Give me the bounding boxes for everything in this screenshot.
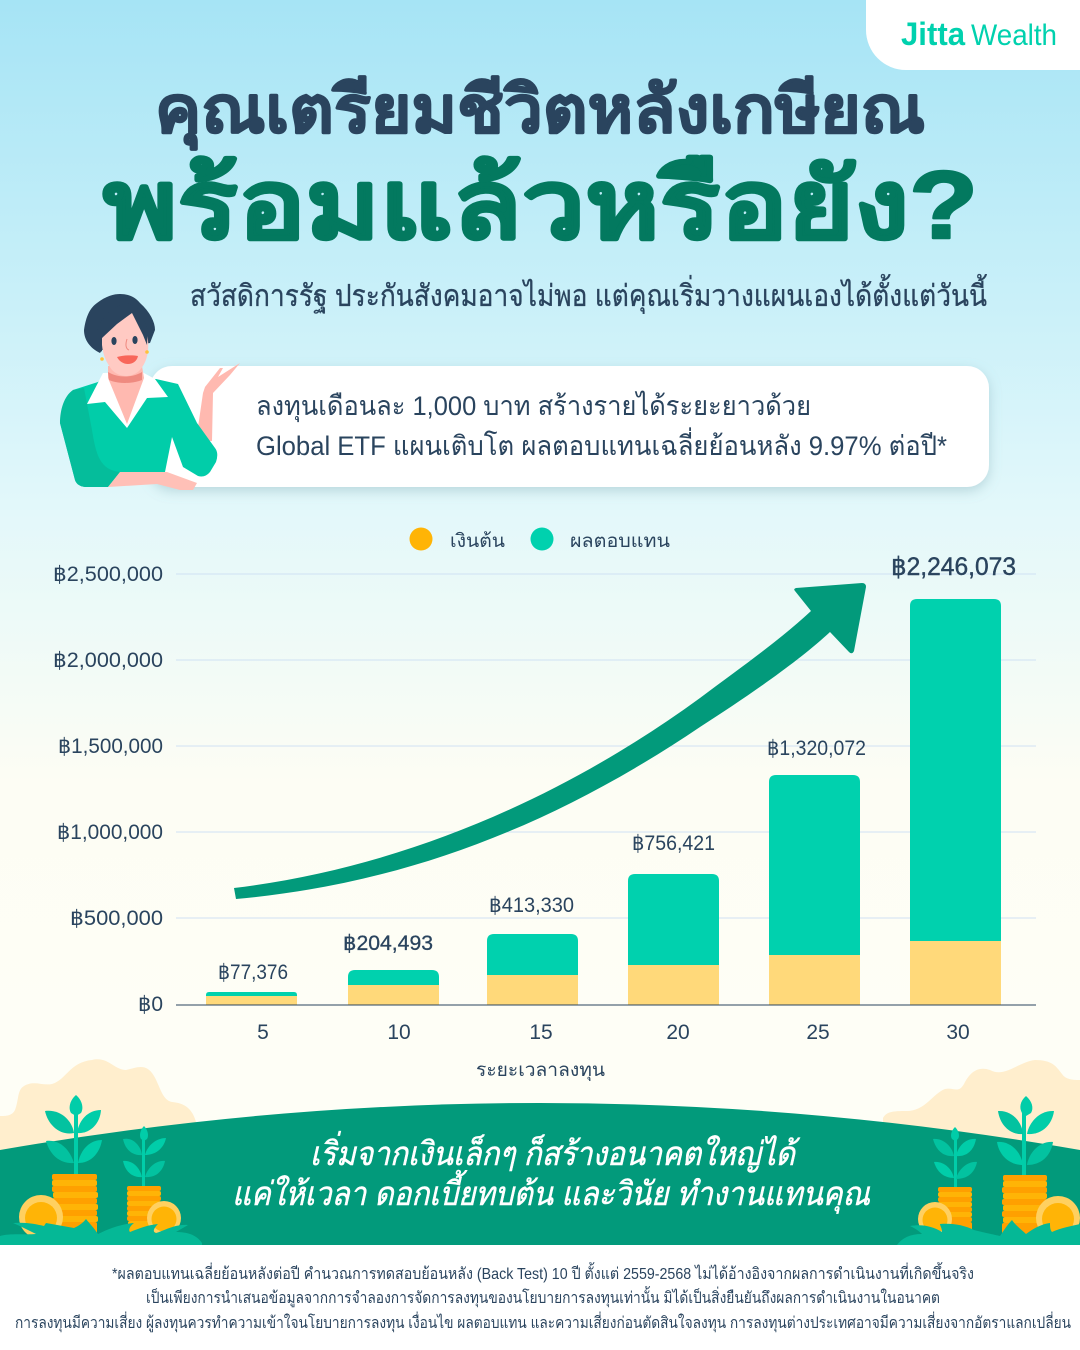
y axis labels: ฿2,000,000 bbox=[53, 649, 163, 672]
logo: Jitta Wealth: Wealth bbox=[971, 19, 1057, 52]
bar value labels: ฿204,493 bbox=[343, 932, 433, 955]
legend: เงินต้น bbox=[450, 531, 505, 552]
banner headline: เริ่มจากเงินเล็กๆ ก็สร้างอนาคตใหญ่ได้ bbox=[310, 1131, 800, 1173]
large plant bbox=[45, 1095, 102, 1174]
y axis labels: ฿0 bbox=[138, 993, 163, 1016]
foliage bbox=[897, 1220, 1080, 1245]
callout text bbox=[256, 391, 947, 461]
bar value labels bbox=[218, 553, 1016, 984]
subtitle: สวัสดิการรัฐ ประกันสังคมอาจไม่พอ แต่คุณเริ่มวางแผนเองได้ตั้งแต่วันนี้ bbox=[190, 274, 987, 315]
small plant bbox=[123, 1126, 166, 1187]
hair back bbox=[84, 294, 155, 353]
small plant bbox=[933, 1127, 977, 1189]
banner illustration: right plants and coins bbox=[897, 1096, 1080, 1245]
coins bbox=[19, 1195, 63, 1239]
raised arm bbox=[196, 363, 240, 441]
bar value labels: ฿756,421 bbox=[632, 832, 715, 855]
fringe bbox=[96, 303, 148, 352]
x axis labels: 25 bbox=[806, 1021, 830, 1044]
title line 2: พร้อมแล้วหรือยัง? bbox=[103, 152, 978, 259]
y axis labels: ฿2,500,000 bbox=[53, 563, 163, 586]
x axis labels: 15 bbox=[529, 1021, 553, 1044]
growth arrow bbox=[234, 583, 866, 899]
small coin stack bbox=[127, 1186, 161, 1235]
x axis labels: 5 bbox=[257, 1021, 269, 1044]
decorative hill blobs bbox=[0, 1059, 1080, 1160]
y axis labels: ฿500,000 bbox=[70, 907, 163, 930]
x axis labels bbox=[257, 1021, 970, 1044]
eyes bbox=[111, 337, 117, 345]
x axis labels: 20 bbox=[666, 1021, 690, 1044]
bar chart bbox=[53, 553, 1036, 1082]
y axis labels: ฿1,500,000 bbox=[58, 735, 163, 758]
logo: Jitta Wealth bbox=[866, 0, 1080, 70]
y axis labels bbox=[53, 563, 163, 1016]
neck and chest bbox=[108, 366, 144, 424]
x axis title: ระยะเวลาลงทุน bbox=[476, 1060, 605, 1082]
callout card bbox=[150, 366, 989, 487]
logo: Jitta Wealth: Jitta bbox=[901, 16, 965, 52]
legend: ผลตอบแทน bbox=[570, 531, 670, 552]
x axis labels: 10 bbox=[387, 1021, 411, 1044]
banner headline bbox=[232, 1131, 870, 1214]
earrings bbox=[100, 357, 104, 361]
mouth bbox=[117, 355, 138, 364]
banner illustration: left plants and coins bbox=[0, 1095, 202, 1245]
nose bbox=[126, 339, 129, 350]
bar value labels: ฿77,376 bbox=[218, 961, 288, 984]
callout text: ลงทุนเดือนละ 1,000 บาท สร้างรายได้ระยะยาวด้วย bbox=[256, 391, 811, 423]
large plant bbox=[997, 1096, 1054, 1176]
face bbox=[102, 312, 148, 376]
footer disclaimer bbox=[15, 1262, 1071, 1333]
y axis labels: ฿1,000,000 bbox=[57, 821, 163, 844]
bar value labels: ฿1,320,072 bbox=[767, 737, 866, 760]
large coin stack bbox=[1002, 1175, 1047, 1237]
foliage bbox=[0, 1219, 202, 1245]
x axis labels: 30 bbox=[946, 1021, 970, 1044]
small coin stack bbox=[938, 1187, 972, 1236]
bar value labels: ฿413,330 bbox=[489, 894, 574, 917]
footer panel bbox=[0, 1245, 1080, 1350]
lower arm bbox=[108, 472, 197, 490]
large coin stack bbox=[52, 1174, 98, 1236]
banner headline: แค่ให้เวลา ดอกเบี้ยทบต้น และวินัย ทำงานแทนคุณ bbox=[232, 1170, 870, 1214]
footer disclaimer: เป็นเพียงการนำเสนอข้อมูลจากการจำลองการจัดการลงทุนของนโยบายการลงทุนเท่านั้น มิได้เป็นสิ่งยืนยันถึงผลการดำเนินงานในอนาคต bbox=[146, 1286, 940, 1308]
bottom banner bbox=[0, 1103, 1080, 1245]
callout text: Global ETF แผนเติบโต ผลตอบแทนเฉลี่ยย้อนหลัง 9.97% ต่อปี* bbox=[256, 427, 947, 461]
bar value labels: ฿2,246,073 bbox=[891, 553, 1016, 581]
character: woman presenting bbox=[60, 294, 240, 490]
collar bbox=[87, 372, 168, 428]
coins bbox=[918, 1202, 952, 1236]
legend bbox=[410, 528, 670, 552]
sweater bbox=[60, 377, 217, 487]
bars bbox=[206, 599, 1001, 1005]
footer disclaimer: *ผลตอบแทนเฉลี่ยย้อนหลังต่อปี คำนวณการทดสอบย้อนหลัง (Back Test) 10 ปี ตั้งแต่ 2559-2568 ไม่ได้อ้างอิงจากผลการดำเนินงานที่เกิดขึ้นจริง bbox=[112, 1262, 974, 1283]
title line 1: คุณเตรียมชีวิตหลังเกษียณ bbox=[155, 73, 925, 151]
